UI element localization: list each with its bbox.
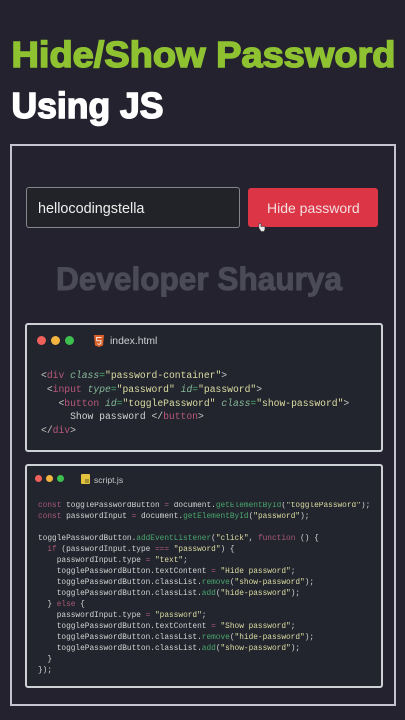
title: Hide/Show Password <box>12 34 396 75</box>
title: Using JS <box>12 85 164 126</box>
html code: <div class="password-container"> <input type="password" id="password"> <button id="togglePassword" class="show-password"> Show password </button> </div> <box>41 370 349 436</box>
window dots <box>37 336 74 345</box>
password input <box>26 187 240 228</box>
icon: html5 <box>94 335 104 347</box>
hide password button <box>248 188 378 227</box>
window dots <box>35 475 64 482</box>
js glyph mark <box>85 479 89 483</box>
filename: script.js <box>94 474 123 484</box>
js code: const togglePasswordButton = document.getElementById("togglePassword"); const passwordInput = document.getElementById("password"); togglePasswordButton.addEventListener("click", function () { if (passwordInput.type === "password") { passwordInput.type = "text"; togglePasswordButton.textContent = "Hide password"; togglePasswordButton.classList.remove("show-password"); togglePasswordButton.classList.add("hide-password"); } else { passwordInput.type = "password"; togglePasswordButton.textContent = "Show password"; togglePasswordButton.classList.remove("hide-password"); togglePasswordButton.classList.add("show-password"); } }); <box>38 502 370 675</box>
icon: hand cursor <box>258 223 266 232</box>
panel: demo frame <box>10 144 396 706</box>
filename: index.html <box>110 336 157 346</box>
watermark: Developer Shaurya <box>56 261 343 297</box>
icon: js file <box>81 474 90 484</box>
input text: hellocodingstella <box>38 201 144 217</box>
title <box>12 34 396 126</box>
button label: Hide password <box>267 200 360 216</box>
panel: js code <box>25 464 383 688</box>
panel: html code <box>25 323 383 452</box>
